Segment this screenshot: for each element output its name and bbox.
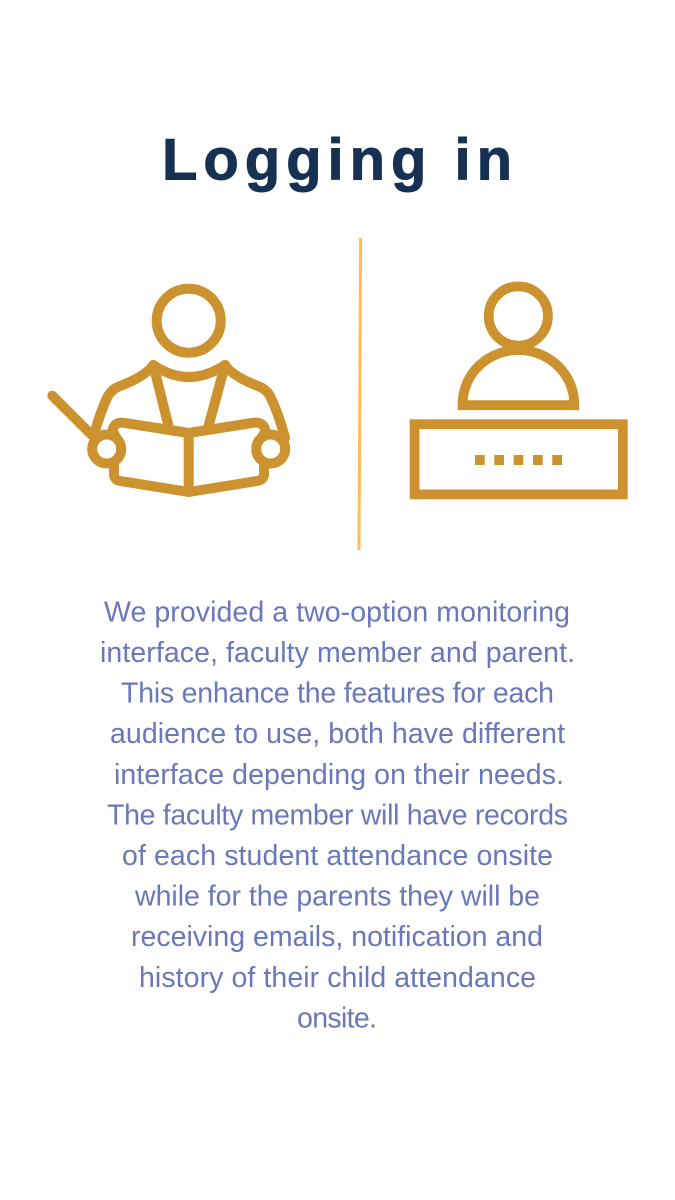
body text: of each student attendance onsite [122, 840, 553, 872]
body text: The faculty member will have records [107, 799, 568, 831]
body text [100, 596, 575, 1034]
body text: onsite. [297, 1002, 377, 1034]
title: Logging in [162, 127, 512, 192]
body text: This enhance the features for each [121, 678, 554, 710]
body text: We provided a two-option monitoring [104, 596, 570, 628]
body text: audience to use, both have different [110, 718, 565, 750]
body text: while for the parents they will be [134, 881, 540, 913]
divider line [359, 238, 361, 550]
icon: user at password box [415, 286, 623, 494]
body text: interface depending on their needs. [114, 759, 564, 791]
body text: receiving emails, notification and [131, 921, 543, 953]
icon: teacher reading a book with pointer [52, 289, 285, 492]
body text: history of their child attendance [139, 962, 536, 994]
body text: interface, faculty member and parent. [100, 637, 575, 669]
